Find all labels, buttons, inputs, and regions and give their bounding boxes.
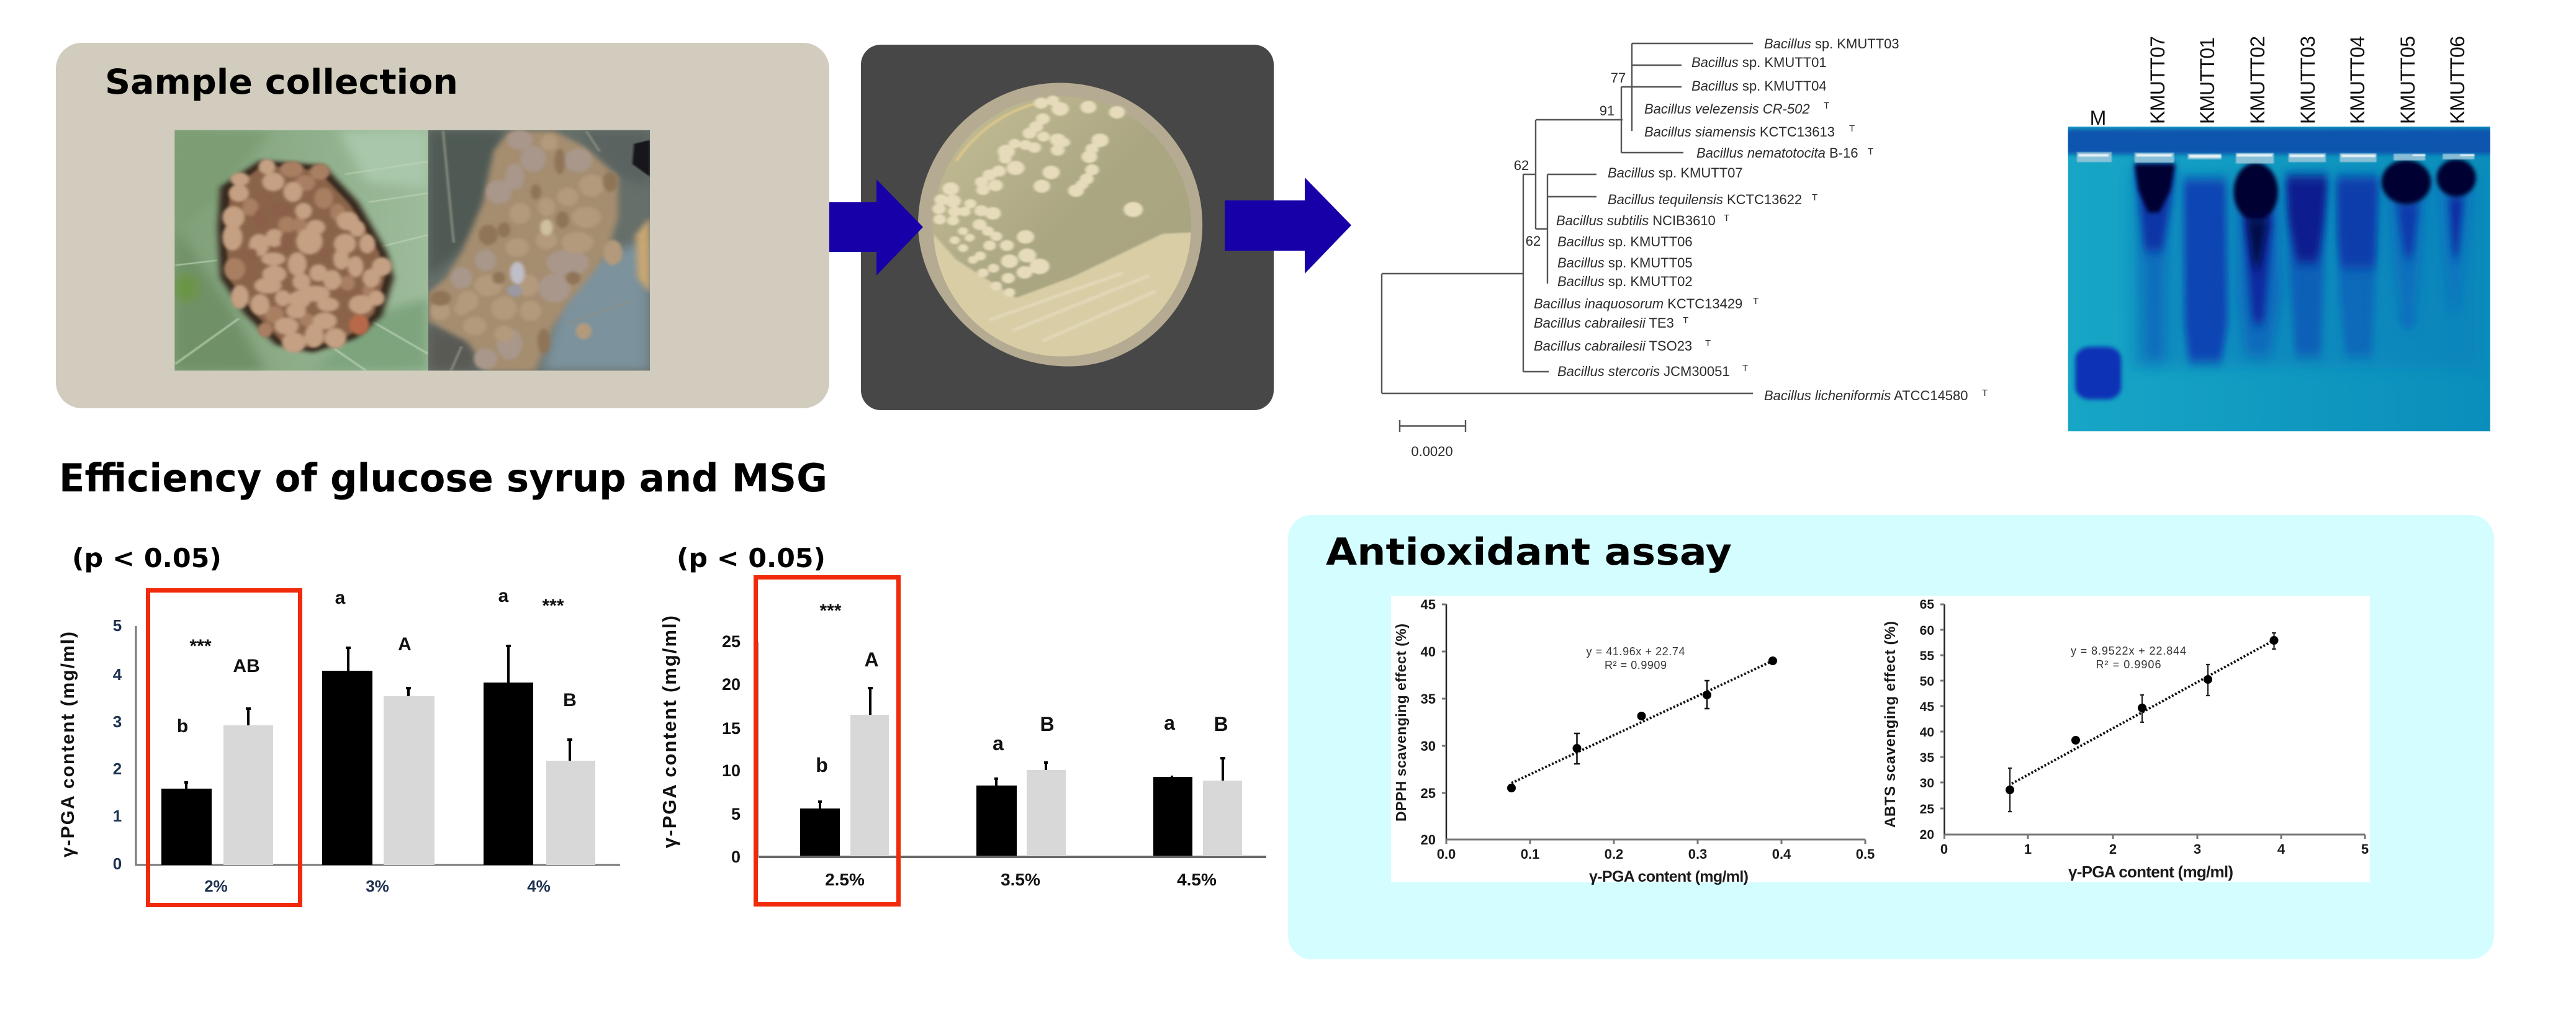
- tree labels: Bacillus sp. KMUTT02: [1557, 274, 1693, 289]
- axes: [136, 626, 620, 865]
- significance letters: B: [1214, 713, 1228, 735]
- tree labels: Bacillus nematotocita B-16: [1696, 145, 1858, 161]
- y axis ticks: 25: [1920, 802, 1934, 817]
- tree labels: Bacillus sp. KMUTT07: [1608, 165, 1743, 181]
- heading: antioxidant assay: Antioxidant assay: [1326, 531, 1732, 574]
- y axis ticks: [113, 616, 122, 873]
- y axis ticks: 20: [1421, 832, 1436, 848]
- tree labels: T: [1683, 315, 1688, 326]
- y axis title: γ-PGA content (mg/ml): [659, 616, 680, 848]
- x axis ticks: 0: [1940, 841, 1948, 857]
- lane labels: KMUTT06: [2446, 36, 2469, 124]
- y axis title: DPPH scavenging effect (%): [1393, 624, 1409, 822]
- x axis ticks: 0.5: [1856, 846, 1875, 862]
- y axis ticks: 4: [113, 665, 122, 684]
- tree labels: Bacillus sp. KMUTT04: [1691, 78, 1827, 94]
- tree labels: Bacillus sp. KMUTT05: [1557, 255, 1693, 271]
- tree labels: T: [1742, 363, 1748, 374]
- y axis ticks: 20: [1920, 828, 1934, 842]
- y axis ticks: 45: [1421, 597, 1436, 612]
- scale bar: [1400, 420, 1466, 459]
- bars: [800, 715, 1242, 856]
- y axis ticks: 25: [722, 632, 741, 651]
- arrow: colonies to phylogeny: [1225, 177, 1351, 274]
- data points: [1507, 656, 1777, 792]
- tree labels: T: [1849, 123, 1855, 134]
- y axis ticks: [1920, 598, 1934, 842]
- x axis ticks: 5: [2361, 841, 2369, 857]
- bootstrap values: 62: [1526, 233, 1541, 249]
- x axis ticks: 1: [2024, 841, 2032, 857]
- x axis labels: 2%: [204, 877, 228, 895]
- bootstrap values: 91: [1600, 103, 1615, 119]
- lane labels: [2090, 36, 2469, 129]
- x axis title: γ-PGA content (mg/ml): [2068, 862, 2233, 881]
- y axis ticks: 10: [722, 761, 741, 780]
- x axis ticks: 2: [2109, 841, 2117, 857]
- significance letters: [177, 586, 577, 737]
- tree labels: Bacillus licheniformis ATCC14580: [1764, 388, 1968, 403]
- tree labels: T: [1982, 388, 1988, 398]
- x axis labels: 3%: [366, 877, 389, 895]
- significance letters: B: [563, 690, 577, 710]
- tree labels: T: [1824, 101, 1829, 111]
- significance letters: B: [1040, 713, 1055, 735]
- y axis ticks: 20: [722, 675, 741, 694]
- lane labels: KMUTT02: [2246, 36, 2269, 124]
- x axis ticks: 4: [2277, 841, 2286, 857]
- lane labels: KMUTT07: [2146, 36, 2169, 124]
- y axis ticks: 3: [113, 712, 122, 731]
- tree labels: Bacillus inaquosorum KCTC13429: [1534, 296, 1742, 311]
- equation: y = 41.96x + 22.74: [1587, 645, 1685, 658]
- x axis ticks: 3: [2194, 841, 2201, 857]
- x axis labels: 4%: [527, 877, 551, 895]
- y axis ticks: 40: [1920, 725, 1934, 740]
- lane labels: M: [2090, 107, 2106, 129]
- significance letters: [816, 601, 1228, 776]
- y axis ticks: 25: [1421, 786, 1436, 801]
- panel: isolated colonies on agar plate: [861, 45, 1274, 410]
- significance letters: A: [398, 634, 412, 655]
- y axis ticks: 0: [113, 854, 122, 873]
- error bars: [184, 646, 572, 789]
- tree labels: T: [1705, 338, 1711, 349]
- significance letters: a: [993, 732, 1004, 755]
- significance note: (p < 0.05): [72, 543, 222, 573]
- tree labels: Bacillus velezensis CR-502: [1644, 101, 1810, 117]
- significance note: (p < 0.05): [677, 543, 826, 573]
- heading: efficiency of glucose syrup and MSG: Efficiency of glucose syrup and MSG: [59, 455, 827, 501]
- scatter plot: DPPH scavenging: [1393, 597, 1875, 885]
- lane labels: KMUTT03: [2297, 36, 2319, 124]
- lane labels: KMUTT04: [2346, 36, 2369, 124]
- y axis ticks: 15: [722, 719, 741, 738]
- x axis labels: 4.5%: [1177, 870, 1217, 889]
- significance letters: a: [335, 588, 346, 608]
- x axis labels: 2.5%: [825, 870, 865, 889]
- y axis ticks: 30: [1421, 738, 1436, 754]
- y axis ticks: 30: [1920, 776, 1934, 790]
- equation: R² = 0.9909: [1605, 659, 1667, 671]
- x axis ticks: 0.2: [1605, 846, 1623, 862]
- x axis ticks: 0.1: [1521, 846, 1539, 862]
- x axis ticks: 0.4: [1772, 846, 1791, 862]
- plot background: [1391, 596, 2370, 882]
- highlight box: 2.5%: [756, 577, 899, 905]
- tree labels: T: [1753, 296, 1759, 307]
- equation: [1587, 645, 1685, 671]
- scale bar: 0.0020: [1411, 444, 1453, 459]
- icon: petri dish with colonies: [918, 83, 1202, 367]
- significance letters: A: [864, 648, 879, 671]
- x axis ticks: [1437, 846, 1875, 862]
- bootstrap values: 77: [1611, 70, 1626, 86]
- phylogenetic tree: [1382, 36, 1988, 459]
- bootstrap values: 62: [1514, 158, 1529, 173]
- axes: [758, 642, 759, 857]
- trend line: [2012, 640, 2274, 784]
- highlight box: 2%: [148, 591, 300, 905]
- significance letters: b: [816, 754, 828, 776]
- y axis ticks: [722, 632, 741, 866]
- x axis ticks: [1940, 841, 2369, 857]
- scatter plot: ABTS scavenging: [1882, 598, 2369, 881]
- panel: antioxidant assay: [1288, 515, 2494, 959]
- significance letters: ***: [542, 596, 564, 616]
- significance letters: b: [177, 716, 188, 737]
- tree labels: Bacillus stercoris JCM30051: [1557, 364, 1730, 379]
- y axis ticks: 40: [1421, 644, 1436, 660]
- axes: [1943, 604, 1945, 835]
- gel electrophoresis image: [2068, 36, 2490, 432]
- trend line: [1511, 661, 1773, 783]
- y axis ticks: 55: [1920, 649, 1934, 663]
- tree labels: Bacillus tequilensis KCTC13622: [1608, 192, 1802, 207]
- tree labels: Bacillus cabrailesii TSO23: [1534, 338, 1692, 354]
- data points: [2006, 633, 2278, 812]
- photo: fresh beans on leaf: [173, 130, 428, 370]
- x axis labels: [204, 877, 551, 895]
- y axis ticks: 60: [1920, 624, 1934, 638]
- significance letters: ***: [819, 601, 842, 621]
- tree labels: Bacillus sp. KMUTT06: [1557, 234, 1693, 249]
- x axis ticks: 0.3: [1688, 846, 1707, 862]
- tree labels: [1534, 36, 1988, 403]
- equation: y = 8.9522x + 22.844: [2071, 645, 2186, 657]
- y axis ticks: 35: [1421, 691, 1436, 707]
- y axis ticks: 1: [113, 807, 122, 825]
- y axis ticks: 2: [113, 759, 122, 778]
- lane labels: KMUTT05: [2397, 36, 2419, 124]
- error bars: [818, 688, 1225, 808]
- bootstrap values: [1514, 70, 1626, 249]
- x axis title: γ-PGA content (mg/ml): [1589, 868, 1749, 885]
- y axis title: γ-PGA content (mg/ml): [58, 632, 78, 858]
- y axis ticks: 0: [731, 848, 741, 866]
- tree branches: [1382, 43, 1753, 393]
- bar chart: glucose syrup concentration: [58, 543, 620, 905]
- bars: [161, 671, 595, 865]
- x axis ticks: 0.0: [1437, 846, 1456, 862]
- equation: [2071, 645, 2186, 671]
- tree labels: Bacillus sp. KMUTT03: [1764, 36, 1899, 52]
- significance letters: a: [1164, 712, 1175, 734]
- significance letters: ***: [189, 636, 212, 656]
- y axis ticks: 5: [113, 616, 122, 635]
- y axis title: ABTS scavenging effect (%): [1882, 621, 1899, 828]
- tree labels: T: [1868, 146, 1873, 157]
- y axis ticks: 5: [731, 805, 741, 823]
- tree labels: Bacillus sp. KMUTT01: [1691, 55, 1827, 70]
- x axis labels: [825, 870, 1217, 889]
- tree labels: Bacillus siamensis KCTC13613: [1644, 124, 1835, 140]
- tree labels: T: [1812, 192, 1817, 203]
- equation: R² = 0.9906: [2096, 658, 2161, 671]
- tree labels: Bacillus cabrailesii TE3: [1534, 315, 1674, 331]
- y axis ticks: 35: [1920, 751, 1934, 765]
- gel body: [2068, 127, 2490, 432]
- photo: fermented beans on leaf: [428, 130, 650, 370]
- y axis ticks: [1421, 597, 1436, 848]
- bar chart: MSG concentration: [659, 543, 1266, 905]
- y axis ticks: 50: [1920, 674, 1934, 689]
- panel: sample collection: [56, 43, 829, 408]
- tree labels: Bacillus subtilis NCIB3610: [1556, 213, 1716, 228]
- significance letters: AB: [233, 656, 260, 676]
- heading: sample collection: Sample collection: [105, 62, 458, 102]
- y axis ticks: 65: [1920, 598, 1934, 612]
- arrow: sample to colonies: [829, 179, 923, 275]
- axes: [1446, 604, 1447, 840]
- tree labels: T: [1724, 213, 1729, 223]
- lane labels: KMUTT01: [2196, 37, 2218, 124]
- y axis ticks: 45: [1920, 700, 1934, 714]
- significance letters: a: [498, 586, 509, 606]
- x axis labels: 3.5%: [1001, 870, 1040, 889]
